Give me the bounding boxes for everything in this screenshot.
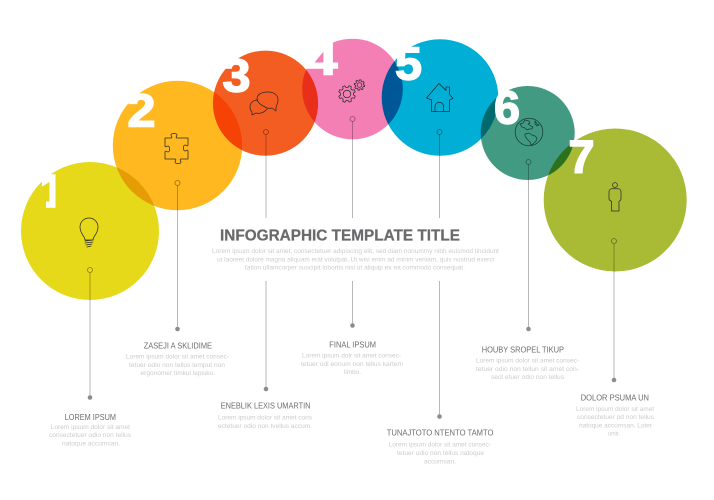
icon: speech bubbles [250,92,278,115]
text block: step 6: HOUBY SROPEL TIKUP [482,346,564,354]
text block: step 5: Lorem ipsum dolor sit amet consec- [389,442,491,449]
text block: step 5: tetuer odio non tellus natoque [397,450,485,457]
icon: light bulb [80,218,98,247]
connector: step 1 [88,268,92,400]
text block: step 7: DOLOR PSUMA UN [581,394,649,403]
title: INFOGRAPHIC TEMPLATE TITLE [220,228,460,245]
intro text [212,248,499,272]
text block: step 4: limbo. [344,369,361,376]
text block: step 7: natoque accumsan. Loter [579,422,652,430]
text block: step 7 [576,394,654,438]
text block: step 2: ergonomer timkul lepisku. [140,370,215,377]
text block: step 7: Lorem ipsum dolor sit amet [576,406,654,413]
step numbers: 3 [222,50,250,102]
text block: step 7: consectetuer od non tellus [577,414,654,421]
text block: step 2: Lorem ipsum dolor sit amet consec- [126,354,229,361]
text block: step 7: umir. [608,430,620,438]
infographic canvas [21,38,687,464]
text block: step 1: LOREM IPSUM [65,413,116,422]
text block: step 3: Lorem ipsum dolor sit amet cons [218,415,312,422]
text block: step 4: Lorem ipsum dolr sit amet consec- [302,353,401,360]
text block: step 4: FINAL IPSUM [329,340,376,350]
intro text: Lorem ipsum dolor sit amet, consectetuer adipiscing elit, sed diam nonummy nibh euismod tincidunt [212,248,499,255]
text block: step 2: tetuer odio non tellus lemput non [129,362,226,369]
text block: step 3: ENEBLIK LEXIS UMARTIN [221,402,311,411]
text block: step 5: TUNAJTOTO NTENTO TAMTO [387,429,494,438]
text block: step 3 [218,402,312,430]
icon: globe [515,118,543,146]
step numbers: 2 [128,84,156,136]
icon: house [426,84,453,112]
text block: step 3: ectetuer odio non tvellus accum. [218,423,312,430]
step numbers [42,42,594,208]
text block: step 1 [49,413,131,448]
step numbers: 4 [306,32,338,84]
connector: step 7 [612,238,616,382]
icon: gears [336,79,366,105]
text block: step 1: consectetuer odio non tellus [49,432,131,439]
connector: step 3 [264,130,268,391]
text block: step 2 [126,342,229,377]
intro text: ut laoreet dolore magna aliquam erat volutpat. Ut wisi enim ad minim veniam, quis nostrud exerci [217,256,494,264]
step numbers: 5 [395,38,422,90]
text block: step 6: sect etuer odio non tellus [491,374,564,381]
text block: step 4 [301,340,403,376]
connector: step 2 [175,180,180,331]
icon: puzzle piece [165,134,188,164]
text block: step 1: Lorem ipsum dolor sit amet [51,424,130,431]
icon: person [609,183,621,211]
text block: step 2: ZASEJI A SKLIDIME [144,342,212,351]
text block: step 6 [476,346,579,381]
step numbers: 6 [494,82,520,134]
intro text: tation ullamcorper suscipit lobortis nisl ut aliquip ex ea commodo consequat. [245,264,465,272]
overlapping colored circles [21,39,687,300]
text block: step 5 [387,429,494,466]
text block: step 1: natoque accumsan. [62,440,120,448]
step numbers: 7 [568,130,594,182]
text block: step 5: accumsan. [424,458,456,466]
connector: step 6 [526,160,531,331]
text block: step 4: tetuer odi eonum non tellus kartem [301,361,403,368]
text block: step 6: Lorem ipsum dolor sit amet consec- [476,358,579,365]
connector: step 4 [350,116,355,328]
connector: step 5 [437,130,442,419]
step numbers: 1 [40,165,65,217]
text block: step 6: tetuer odio non tellun sit amet con- [476,366,579,373]
